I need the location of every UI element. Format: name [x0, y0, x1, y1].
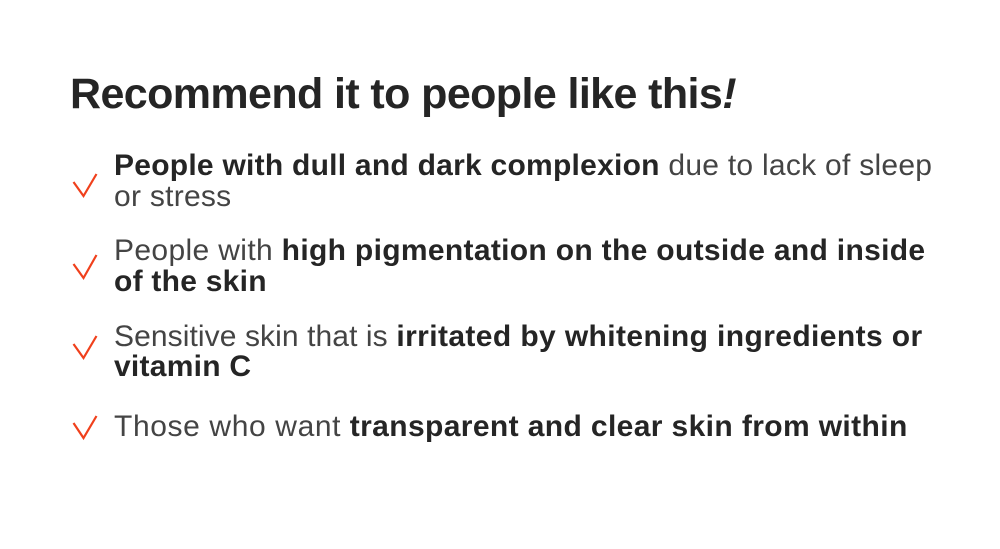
text: item 1: People with dull and dark complexion due to lack of sleep [114, 149, 932, 182]
title: Recommend it to people like this! [70, 70, 736, 118]
text: item 1 [114, 149, 932, 212]
text: item 3: Sensitive skin that is irritated by whitening ingredients or [114, 320, 923, 353]
icon: check 3 [72, 336, 98, 360]
text: item 2: of the skin [114, 264, 267, 298]
icon: check 2 [72, 254, 98, 280]
icon: check 4 [72, 416, 98, 440]
text: item 4: Those who want transparent and clear skin from within [114, 410, 908, 443]
icon: check 1 [72, 174, 98, 198]
text: item 3: vitamin C [114, 350, 251, 383]
text: item 1: or stress [114, 180, 231, 212]
text: item 3 [114, 320, 923, 383]
text: item 2: People with high pigmentation on the outside and inside [114, 234, 925, 267]
text: item 2 [114, 234, 925, 298]
